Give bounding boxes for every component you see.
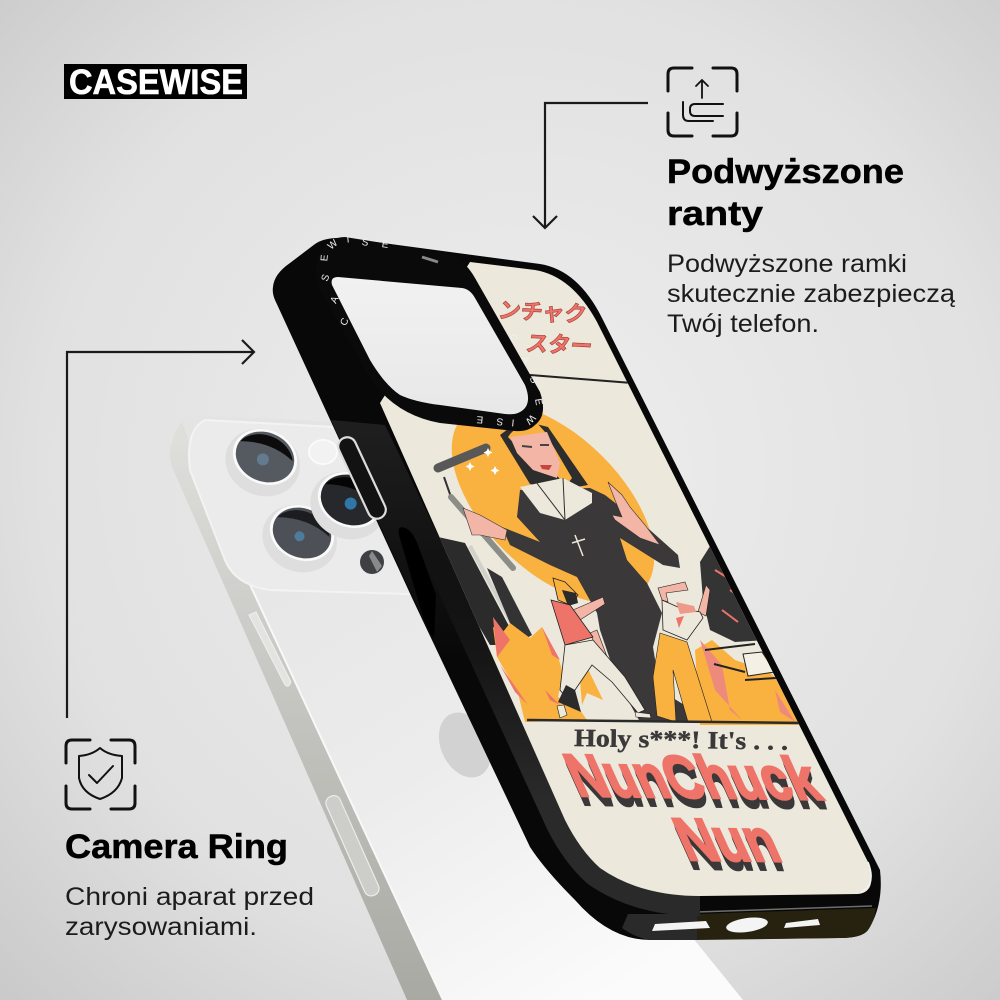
fire left: [493, 623, 587, 722]
ring lettering: S: [361, 237, 369, 249]
lower side button: [324, 793, 381, 898]
ring lettering: C: [338, 316, 352, 328]
lens 1: [215, 417, 311, 508]
helicopter: [705, 644, 776, 680]
camera plateau: [189, 420, 440, 595]
arrow: top: [533, 103, 648, 228]
sparkles: [466, 448, 500, 475]
text: raised edges description: [667, 250, 955, 338]
side button pill: [335, 434, 389, 522]
ring lettering: A: [519, 354, 532, 366]
art bottom line: [527, 720, 804, 723]
panel divider line: [530, 375, 632, 383]
nun necklace: [536, 478, 565, 520]
lens 3: [300, 460, 396, 551]
black case: [273, 238, 881, 940]
ring lettering: E: [381, 239, 389, 251]
ring highlight: [422, 257, 438, 262]
ring lettering: S: [320, 273, 332, 283]
corner glint: [860, 862, 871, 893]
roller: [438, 448, 486, 468]
ring lettering: [319, 234, 544, 428]
right hand: [608, 482, 660, 545]
right fighter: [653, 582, 712, 722]
lidar sensor: [360, 550, 384, 574]
poster artwork: [380, 262, 871, 896]
text: raised edges description: Twój telefon.: [667, 310, 819, 338]
text: camera ring description: zarysowaniami.: [65, 913, 257, 941]
heading: camera ring: Camera Ring: [65, 828, 288, 866]
building: [438, 537, 532, 645]
case bottom gray section: [622, 914, 697, 940]
poster title: NunChuck: NunChuck: [554, 742, 830, 813]
apple logo: [429, 704, 501, 786]
heading: raised edges: [667, 153, 904, 233]
ring lettering: S: [527, 375, 540, 386]
icon: raised edges: [668, 68, 737, 136]
japanese title: [500, 300, 592, 354]
ring lettering: E: [319, 254, 331, 262]
nun lips and eyes: [540, 465, 552, 470]
ring lettering: E: [532, 398, 544, 407]
fire left streaks: [493, 617, 560, 705]
text: camera ring description: Chroni aparat przed: [65, 883, 314, 911]
nun veil: [500, 424, 588, 486]
nun hair: [508, 423, 572, 486]
logo: CASEWISE: [69, 63, 243, 102]
cross: [572, 535, 585, 556]
lens 2: [252, 493, 348, 584]
white phone: [170, 416, 743, 1000]
band highlight: [193, 462, 443, 1000]
camera ring: [315, 234, 544, 431]
nun face: [510, 432, 560, 478]
japanese title: ンチャク: [496, 293, 589, 329]
side buttons: [249, 612, 291, 686]
ring lettering: S: [496, 415, 504, 427]
volume slot: [399, 527, 436, 638]
nun collar: [520, 478, 592, 520]
left fighter: [551, 578, 651, 718]
ring lettering: A: [329, 294, 342, 305]
ring lettering: C: [506, 332, 520, 344]
charging port and speakers: [652, 915, 820, 935]
ring lettering: I: [511, 416, 515, 428]
heading: raised edges: ranty: [667, 195, 763, 233]
holy subtitle: Holy s***! It's . . .: [574, 725, 788, 756]
case inner strip: [386, 430, 700, 896]
fire middle: [580, 667, 603, 705]
japanese title: スター: [524, 326, 595, 361]
text: raised edges description: skutecznie zabezpieczą: [667, 280, 955, 308]
heading: raised edges: Podwyższone: [667, 153, 904, 191]
poster title: Nun: Nun: [663, 806, 790, 874]
flash: [309, 440, 337, 464]
ring lettering: E: [476, 413, 484, 425]
orange sun: [452, 414, 654, 602]
ring lettering: W: [326, 237, 341, 252]
fire right and ground: [695, 640, 806, 725]
camera window: [332, 277, 528, 414]
icon: shield: [66, 740, 135, 809]
case glossy section over phone: [331, 420, 527, 720]
text: raised edges description: Podwyższone ramki: [667, 250, 907, 278]
text: camera ring description: [65, 883, 314, 941]
ring lettering: I: [346, 234, 350, 246]
smoke: [700, 546, 757, 642]
case bottom highlight: [697, 906, 872, 912]
nun robe: [502, 488, 688, 720]
ring lettering: W: [522, 412, 537, 427]
case lower tint: [697, 908, 876, 940]
left hand: [463, 508, 507, 540]
arrow: left: [67, 340, 254, 718]
